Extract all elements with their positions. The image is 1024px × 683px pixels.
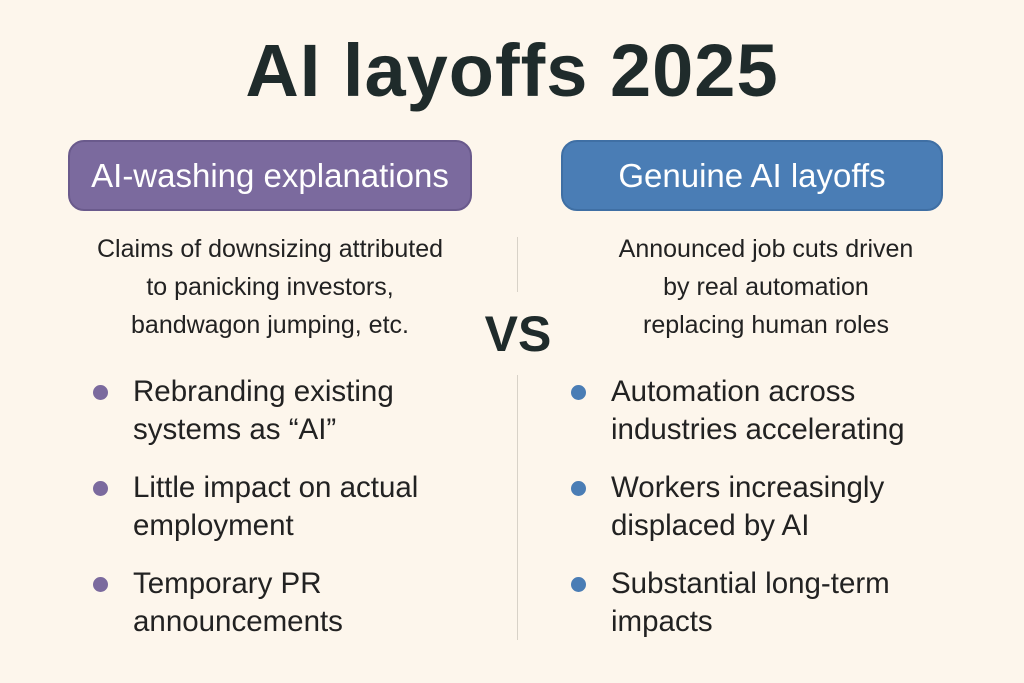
right bullet list xyxy=(571,375,905,638)
title: AI layoffs 2025 xyxy=(245,29,779,112)
right description xyxy=(618,235,913,339)
left bullet list: employment xyxy=(133,509,294,542)
right bullet list: Automation across xyxy=(611,375,855,408)
left bullet list xyxy=(93,375,418,638)
left description xyxy=(97,235,443,339)
left description: bandwagon jumping, etc. xyxy=(131,311,409,339)
right bullet list: industries accelerating xyxy=(611,413,905,446)
left description: to panicking investors, xyxy=(146,273,394,301)
left bullet list: Temporary PR xyxy=(133,567,322,600)
right description: replacing human roles xyxy=(643,311,889,339)
pill: genuine xyxy=(561,140,943,211)
left bullet list: announcements xyxy=(133,605,343,638)
pill: genuine: Genuine AI layoffs xyxy=(618,156,886,194)
vs label: VS xyxy=(485,306,551,362)
pill: AI-washing: AI-washing explanations xyxy=(91,156,449,194)
right bullet list: displaced by AI xyxy=(611,509,809,542)
right bullet list: impacts xyxy=(611,605,713,638)
left bullet list: Little impact on actual xyxy=(133,471,418,504)
left bullet list: systems as “AI” xyxy=(133,413,336,446)
right description: Announced job cuts driven xyxy=(619,235,913,263)
right bullet list: Workers increasingly xyxy=(611,471,884,504)
pill: AI-washing xyxy=(68,140,472,211)
right bullet list: Substantial long-term xyxy=(611,567,890,600)
left bullet list: Rebranding existing xyxy=(133,375,394,408)
right description: by real automation xyxy=(663,273,869,301)
left description: Claims of downsizing attributed xyxy=(97,235,443,263)
